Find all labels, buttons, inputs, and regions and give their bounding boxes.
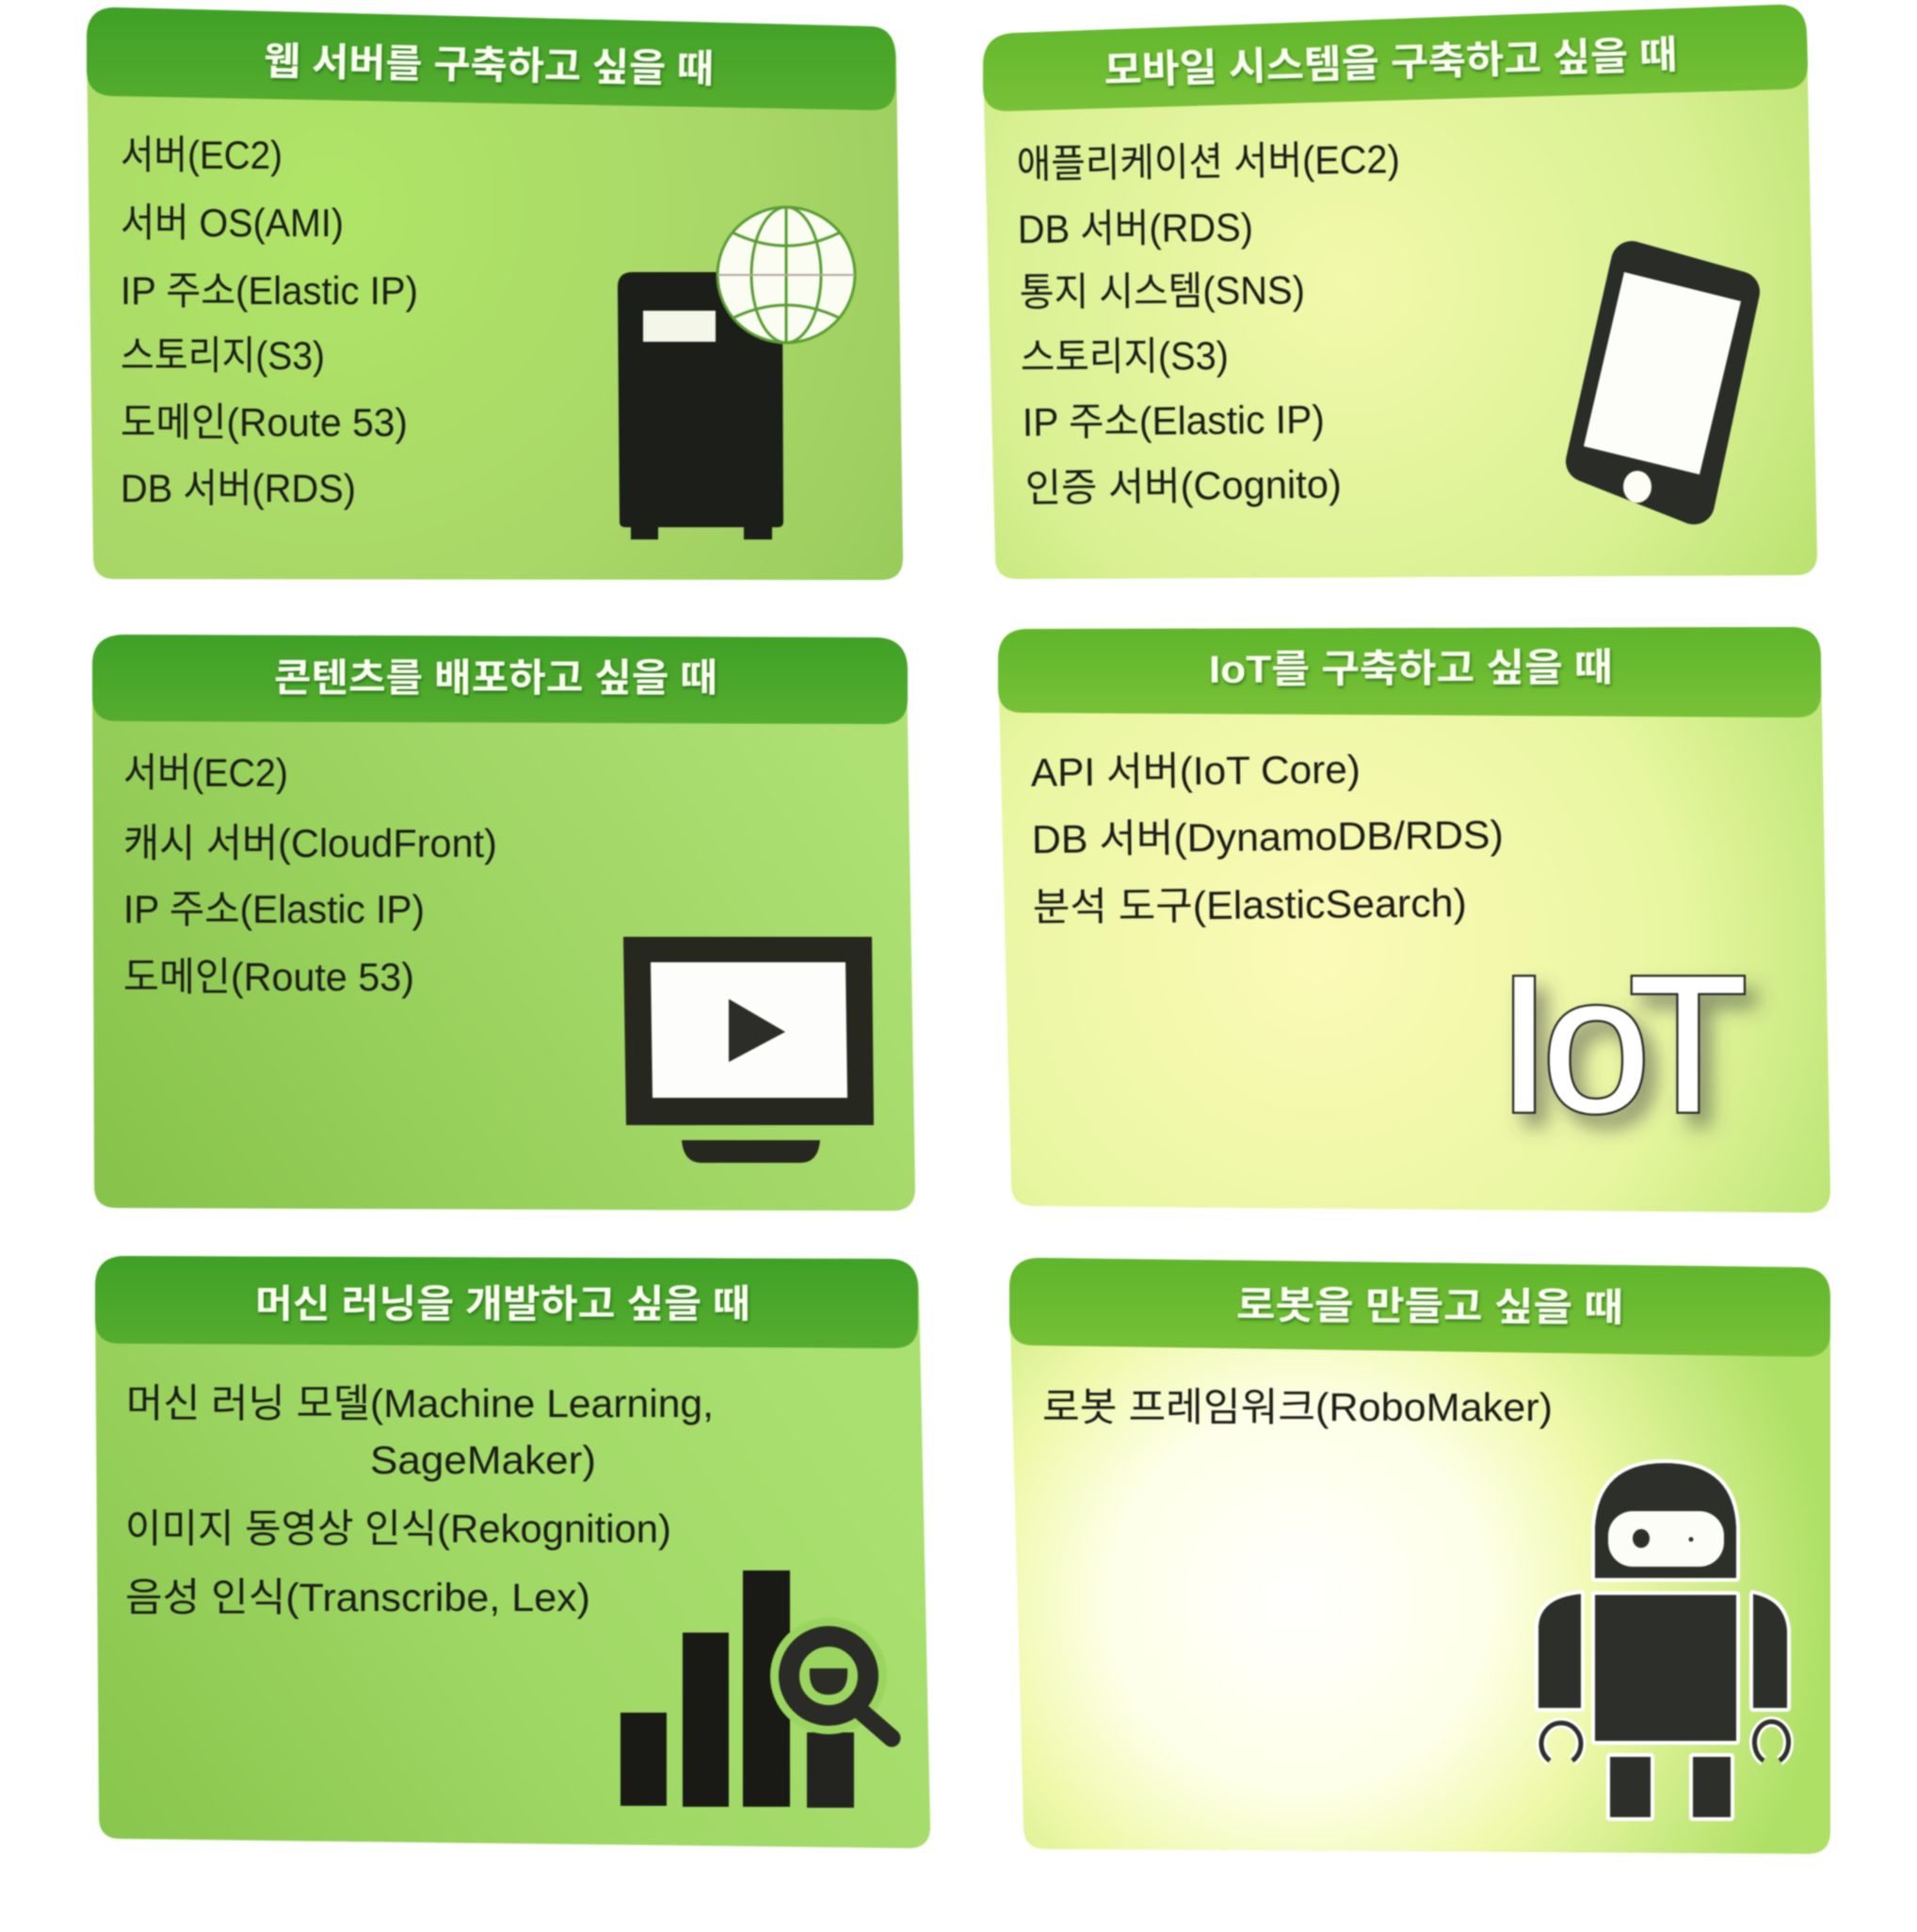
icon: robot: [1538, 1463, 1789, 1817]
service list: 통지 시스템(SNS): [1020, 267, 1305, 314]
service list: IP 주소(Elastic IP): [123, 887, 425, 931]
icon: smartphone: [1584, 262, 1741, 504]
service list: 머신 러닝 모델(Machine Learning,: [126, 1381, 714, 1425]
panel: content delivery: [92, 635, 915, 1211]
heading: 로봇을 만들고 싶을 때: [1236, 1283, 1623, 1329]
service list: 도메인(Route 53): [121, 400, 408, 444]
panel: web server: [87, 8, 903, 580]
card body: [87, 8, 903, 580]
service list: 캐시 서버(CloudFront): [123, 821, 497, 865]
service list: 스토리지(S3): [1021, 333, 1229, 379]
service list: DB 서버(RDS): [1018, 205, 1253, 251]
service list: DB 서버(RDS): [121, 466, 356, 510]
service list: 서버(EC2): [123, 750, 288, 795]
service list: API 서버(IoT Core): [1031, 747, 1361, 795]
service list: [121, 133, 418, 510]
service list: 분석 도구(ElasticSearch): [1033, 880, 1467, 929]
heading: 모바일 시스템을 구축하고 싶을 때: [1103, 33, 1678, 92]
service list: IP 주소(Elastic IP): [1023, 397, 1325, 444]
panel: machine learning: [95, 1256, 930, 1848]
service list: 음성 인식(Transcribe, Lex): [125, 1575, 590, 1619]
service list: 인증 서버(Cognito): [1024, 461, 1342, 510]
service list: [1031, 747, 1504, 929]
service list: [123, 750, 497, 999]
panel: robot: [1009, 1258, 1830, 1854]
service list: SageMaker): [370, 1438, 596, 1482]
icon: bar chart with magnifier: [620, 1570, 892, 1808]
service list: DB 서버(DynamoDB/RDS): [1032, 813, 1504, 861]
service list: [1016, 137, 1400, 510]
service list: 이미지 동영상 인식(Rekognition): [125, 1506, 671, 1551]
panel: IoT: [998, 627, 1830, 1213]
heading: 웹 서버를 구축하고 싶을 때: [264, 40, 715, 90]
heading: 머신 러닝을 개발하고 싶을 때: [255, 1282, 750, 1326]
header bar: [983, 5, 1808, 111]
icon: server with globe: [618, 207, 855, 539]
card body: [1009, 1258, 1830, 1854]
panel: mobile system: [983, 5, 1817, 579]
icon: IoT lettering: IoT: [1497, 936, 1748, 1152]
heading: 콘텐츠를 배포하고 싶을 때: [274, 656, 717, 700]
header bar: [92, 635, 908, 724]
card body: [95, 1256, 930, 1848]
header bar: [998, 627, 1821, 717]
service list: IP 주소(Elastic IP): [121, 268, 418, 313]
service list: 로봇 프레임워크(RoboMaker): [1042, 1385, 1553, 1429]
header bar: [1009, 1258, 1830, 1357]
card body: [998, 627, 1830, 1213]
service list: 서버 OS(AMI): [121, 201, 344, 245]
service list: 애플리케이션 서버(EC2): [1016, 137, 1400, 186]
icon: video monitor: [623, 937, 874, 1163]
heading: IoT를 구축하고 싶을 때: [1209, 646, 1613, 691]
card body: [92, 635, 915, 1211]
card body: [983, 5, 1817, 579]
icon: IoT lettering: IoT: [1497, 936, 1748, 1152]
service list: [125, 1381, 714, 1619]
service list: 스토리지(S3): [121, 333, 325, 378]
header bar: [95, 1256, 918, 1348]
service list: 도메인(Route 53): [123, 955, 414, 999]
header bar: [87, 8, 895, 110]
service list: 서버(EC2): [121, 133, 282, 177]
